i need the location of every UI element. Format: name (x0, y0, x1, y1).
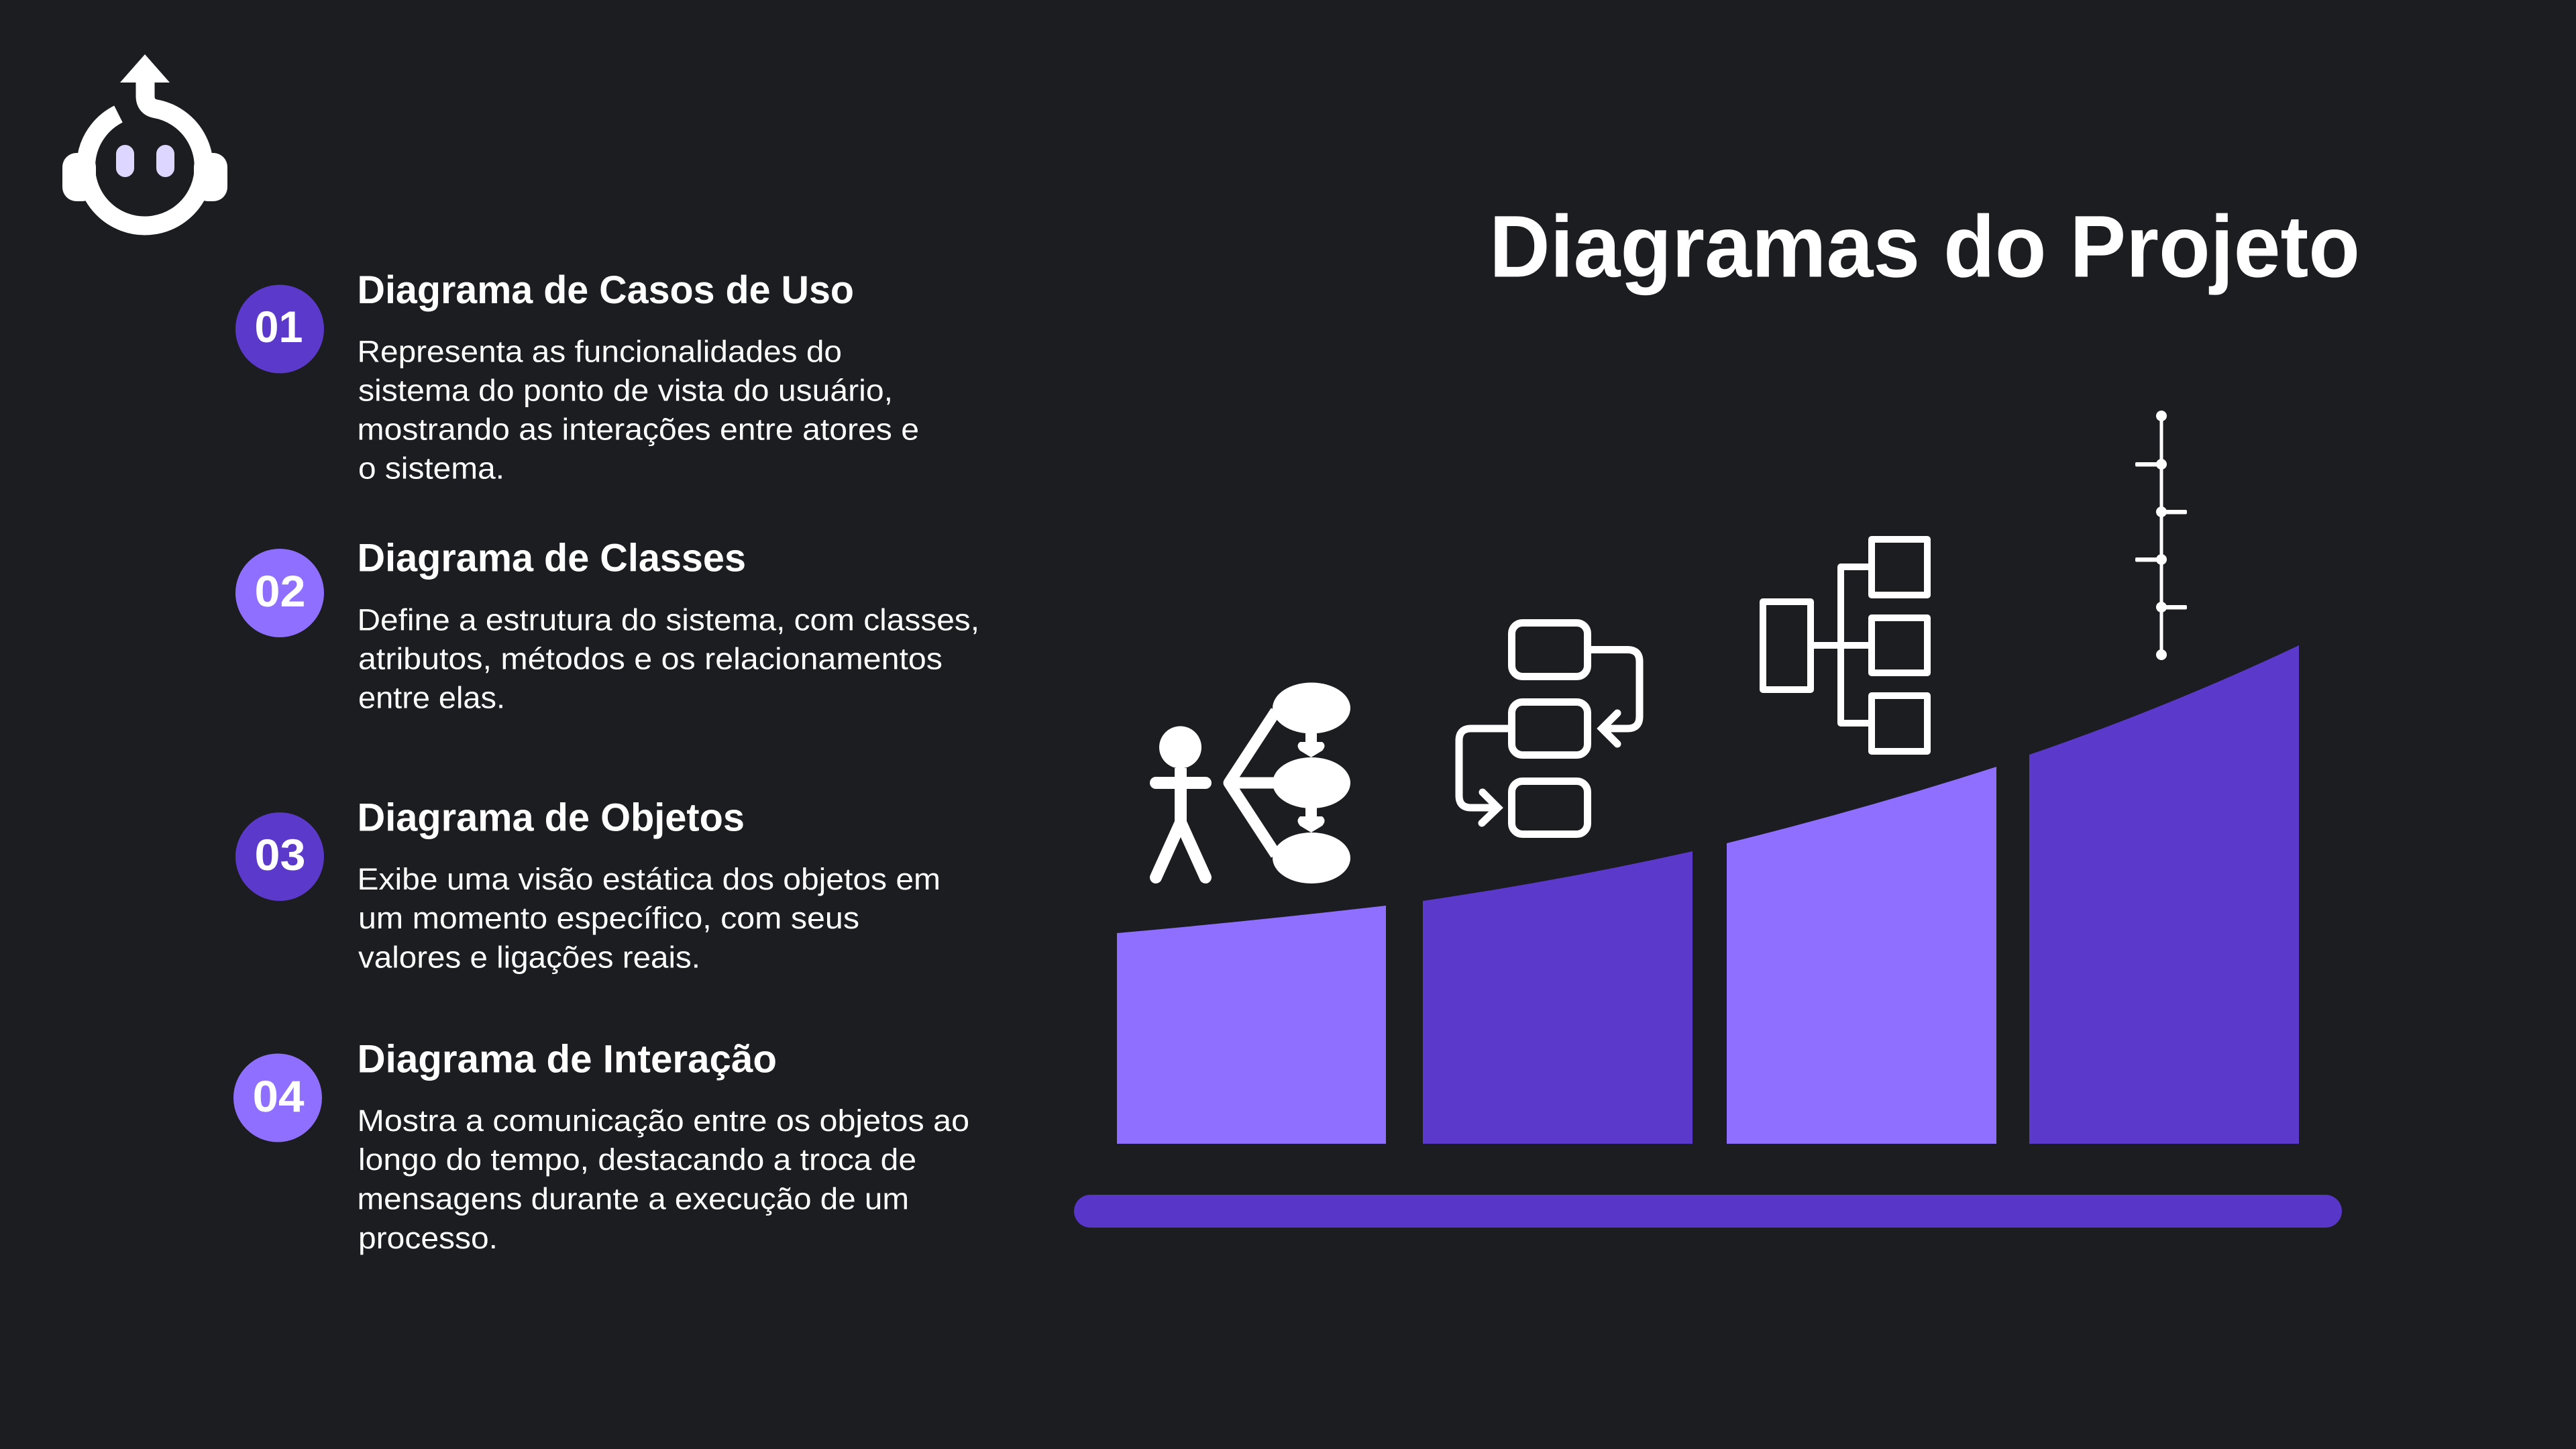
panel: item 02 (235, 537, 979, 715)
number badge 03: 03 (255, 830, 306, 879)
base bar (1074, 1195, 2342, 1228)
panel: item 04 (233, 1037, 969, 1255)
heading 02: Diagrama de Classes (357, 537, 746, 580)
chart: rising stepped bars (1117, 645, 2299, 1144)
number badge 02 (235, 549, 324, 637)
text block 02: entre elas. (358, 680, 505, 715)
text block 01: mostrando as interações entre atores e (357, 412, 919, 447)
bar 4 (2029, 645, 2299, 1144)
number badge 04: 04 (252, 1071, 305, 1121)
icon: sequence lifeline (2135, 411, 2187, 660)
heading 04: Diagrama de Interação (357, 1037, 777, 1081)
icon: use case diagram (1156, 683, 1350, 883)
text block 02 (357, 602, 979, 715)
bar 2 (1423, 851, 1693, 1144)
text block 02: atributos, métodos e os relacionamentos (358, 641, 943, 676)
logo: robot head with upward arrow (62, 54, 227, 225)
icon: object tree diagram (1763, 539, 1927, 751)
number badge 04 (233, 1053, 322, 1142)
text block 01: Representa as funcionalidades do (357, 334, 842, 369)
icon: actor stick figure (1156, 726, 1205, 877)
text block 03: Exibe uma visão estática dos objetos em (357, 862, 941, 896)
text block 01: o sistema. (358, 451, 504, 486)
bar 3 (1727, 767, 1996, 1144)
text block 04: mensagens durante a execução de um (357, 1182, 909, 1216)
number badge 01 (235, 284, 324, 373)
panel: item 03 (235, 796, 941, 974)
text block 01 (357, 334, 919, 486)
bar 1 (1117, 906, 1386, 1144)
icon: use case ellipses with connectors (1229, 683, 1350, 883)
text block 03: valores e ligações reais. (358, 941, 700, 974)
number badge 03 (235, 812, 324, 901)
text block 02: Define a estrutura do sistema, com classes, (357, 602, 979, 637)
title: Diagramas do Projeto (1489, 197, 2360, 295)
text block 04: Mostra a comunicação entre os objetos ao (357, 1104, 969, 1138)
text block 04: longo do tempo, destacando a troca de (358, 1142, 916, 1177)
text block 01: sistema do ponto de vista do usuário, (358, 373, 893, 408)
number badge 01: 01 (255, 302, 303, 352)
number badge 02: 02 (255, 566, 306, 616)
text block 04 (357, 1104, 969, 1255)
text block 03 (357, 862, 941, 974)
text block 04: processo. (358, 1221, 498, 1255)
heading 03: Diagrama de Objetos (357, 796, 745, 840)
text block 03: um momento específico, com seus (358, 901, 859, 935)
panel: item 01 (235, 268, 919, 486)
icon: class flow diagram (1459, 623, 1640, 835)
heading 01: Diagrama de Casos de Uso (357, 268, 854, 312)
